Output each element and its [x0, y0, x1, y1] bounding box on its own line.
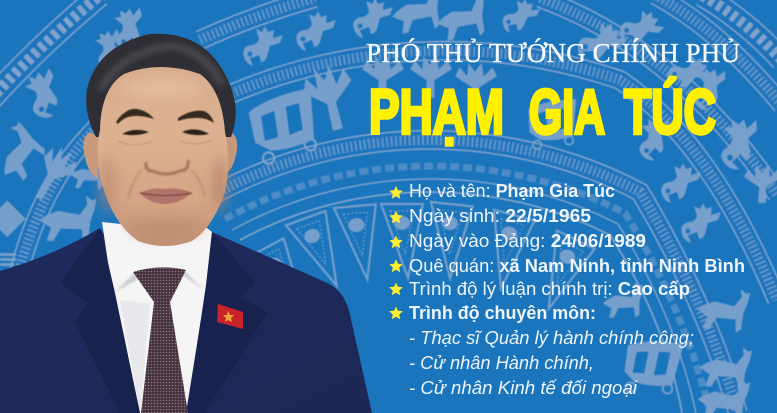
party date: Ngày vào Đảng: 24/06/1989 — [409, 231, 646, 251]
portrait — [0, 34, 372, 413]
suit lapels — [60, 228, 140, 413]
subtitle: PHÓ THỦ TƯỚNG CHÍNH PHỦ — [366, 38, 740, 68]
birth date: Ngày sinh: 22/5/1965 — [409, 206, 591, 226]
eyes — [118, 129, 212, 145]
degree three: - Cử nhân Kinh tế đối ngoại — [409, 378, 638, 398]
bio list — [389, 181, 745, 398]
degree one: - Thạc sĩ Quản lý hành chính công; — [409, 328, 694, 348]
mouth — [140, 188, 192, 204]
flag pin — [217, 304, 243, 329]
necktie — [133, 267, 188, 413]
hair highlights — [100, 46, 222, 90]
professional level: Trình độ chuyên môn: — [409, 303, 596, 323]
smile folds — [128, 170, 205, 198]
hometown: Quê quán: xã Nam Ninh, tỉnh Ninh Bình — [409, 256, 745, 276]
name: TÚC — [624, 78, 716, 148]
name — [369, 78, 716, 148]
political theory level: Trình độ lý luận chính trị: Cao cấp — [409, 279, 690, 299]
hair back — [86, 34, 236, 137]
degree two: - Cử nhân Hành chính, — [409, 353, 594, 373]
collar shadow — [115, 268, 204, 292]
full name: Họ và tên: Phạm Gia Túc — [409, 181, 615, 201]
shirt — [102, 215, 212, 413]
star bullets — [389, 186, 403, 319]
face — [97, 67, 228, 246]
eyebrows — [116, 109, 214, 124]
ears — [83, 132, 102, 178]
suit — [0, 228, 372, 413]
nose — [146, 160, 188, 174]
name: GIA — [529, 78, 605, 148]
name: PHẠM — [369, 78, 504, 148]
face shading — [100, 78, 227, 237]
